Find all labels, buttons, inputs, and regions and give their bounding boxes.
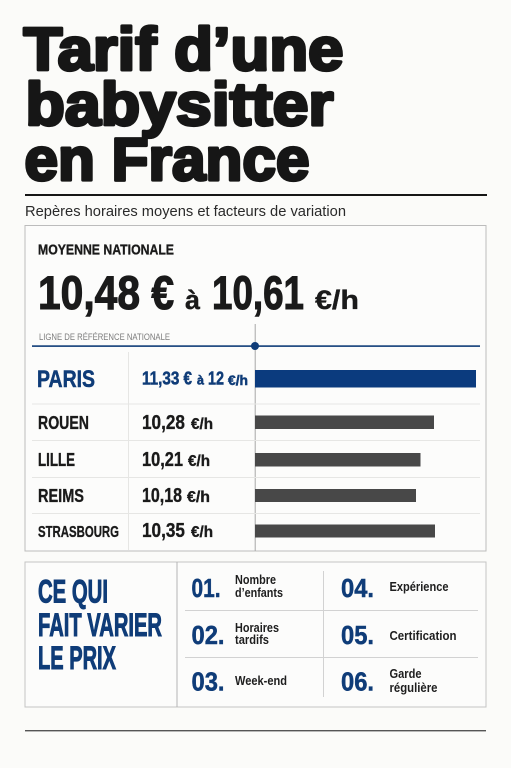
factor 01: d’enfants bbox=[235, 586, 283, 600]
factor 01 bbox=[192, 573, 283, 603]
national average value: 10,48 € bbox=[38, 266, 174, 319]
row: Paris: 11,33 € bbox=[142, 368, 192, 388]
row: Lille bbox=[38, 449, 420, 471]
row: Strasbourg: 10,35 bbox=[142, 520, 185, 542]
factor 05: Certification bbox=[390, 629, 456, 643]
national average value bbox=[38, 266, 359, 319]
row: Reims: REIMS bbox=[38, 486, 84, 506]
national average value: €/h bbox=[315, 285, 359, 315]
row: Reims: €/h bbox=[187, 489, 210, 506]
factor 06 bbox=[341, 666, 438, 696]
national reference line: LIGNE DE RÉFÉRENCE NATIONALE bbox=[39, 332, 170, 343]
row: Lille: LILLE bbox=[38, 450, 75, 470]
row: Strasbourg: STRASBOURG bbox=[38, 524, 119, 541]
factor 06: 06. bbox=[341, 666, 374, 696]
row: Reims: 10,18 bbox=[142, 485, 182, 507]
factor 05 bbox=[341, 620, 456, 650]
title bbox=[24, 16, 344, 193]
heading: ce qui fait varier le prix: CE QUI bbox=[38, 574, 108, 610]
national reference line bbox=[32, 324, 480, 551]
factor 03 bbox=[192, 666, 287, 696]
row: Rouen: ROUEN bbox=[38, 413, 89, 433]
title: Tarif d’une bbox=[24, 16, 344, 83]
row: Strasbourg: €/h bbox=[191, 524, 213, 541]
national average value: 10,61 bbox=[212, 266, 304, 319]
national average value: à bbox=[185, 285, 201, 315]
factor 02 bbox=[192, 620, 279, 650]
label: moyenne nationale: MOYENNE NATIONALE bbox=[38, 242, 174, 258]
factor 04: Expérience bbox=[390, 580, 449, 594]
factor 06: régulière bbox=[390, 681, 438, 695]
heading: ce qui fait varier le prix bbox=[38, 574, 162, 676]
panel: price factors bbox=[25, 562, 486, 707]
row: Strasbourg bbox=[38, 520, 435, 542]
row: Paris: à bbox=[197, 372, 205, 388]
subtitle: Repères horaires moyens et facteurs de variation bbox=[25, 203, 346, 220]
factor 06: Garde bbox=[390, 667, 422, 681]
factor 04 bbox=[341, 573, 449, 603]
factor 04: 04. bbox=[341, 573, 374, 603]
row: Lille: 10,21 bbox=[142, 449, 183, 471]
heading: ce qui fait varier le prix: LE PRIX bbox=[38, 640, 116, 676]
row: Rouen bbox=[38, 412, 434, 434]
factor 01: Nombre bbox=[235, 573, 276, 587]
row: Paris: €/h bbox=[228, 372, 248, 388]
row: Paris bbox=[37, 366, 476, 393]
heading: ce qui fait varier le prix: FAIT VARIER bbox=[38, 607, 162, 643]
factor 05: 05. bbox=[341, 620, 374, 650]
row: Rouen: €/h bbox=[191, 416, 213, 433]
factor 02: Horaires bbox=[235, 621, 279, 635]
factor 02: tardifs bbox=[235, 633, 269, 647]
row: Paris: PARIS bbox=[37, 366, 95, 393]
row: Rouen: 10,28 bbox=[142, 412, 185, 434]
title: babysitter bbox=[26, 71, 334, 138]
factor 02: 02. bbox=[192, 620, 224, 650]
factor 03: 03. bbox=[192, 666, 224, 696]
title: en France bbox=[24, 126, 310, 193]
panel: national average and cities bbox=[25, 226, 486, 551]
factor 03: Week-end bbox=[235, 674, 287, 688]
row: Lille: €/h bbox=[188, 453, 210, 470]
factor 01: 01. bbox=[192, 573, 220, 603]
row: Paris: 12 bbox=[208, 368, 224, 388]
row: Reims bbox=[38, 485, 416, 507]
